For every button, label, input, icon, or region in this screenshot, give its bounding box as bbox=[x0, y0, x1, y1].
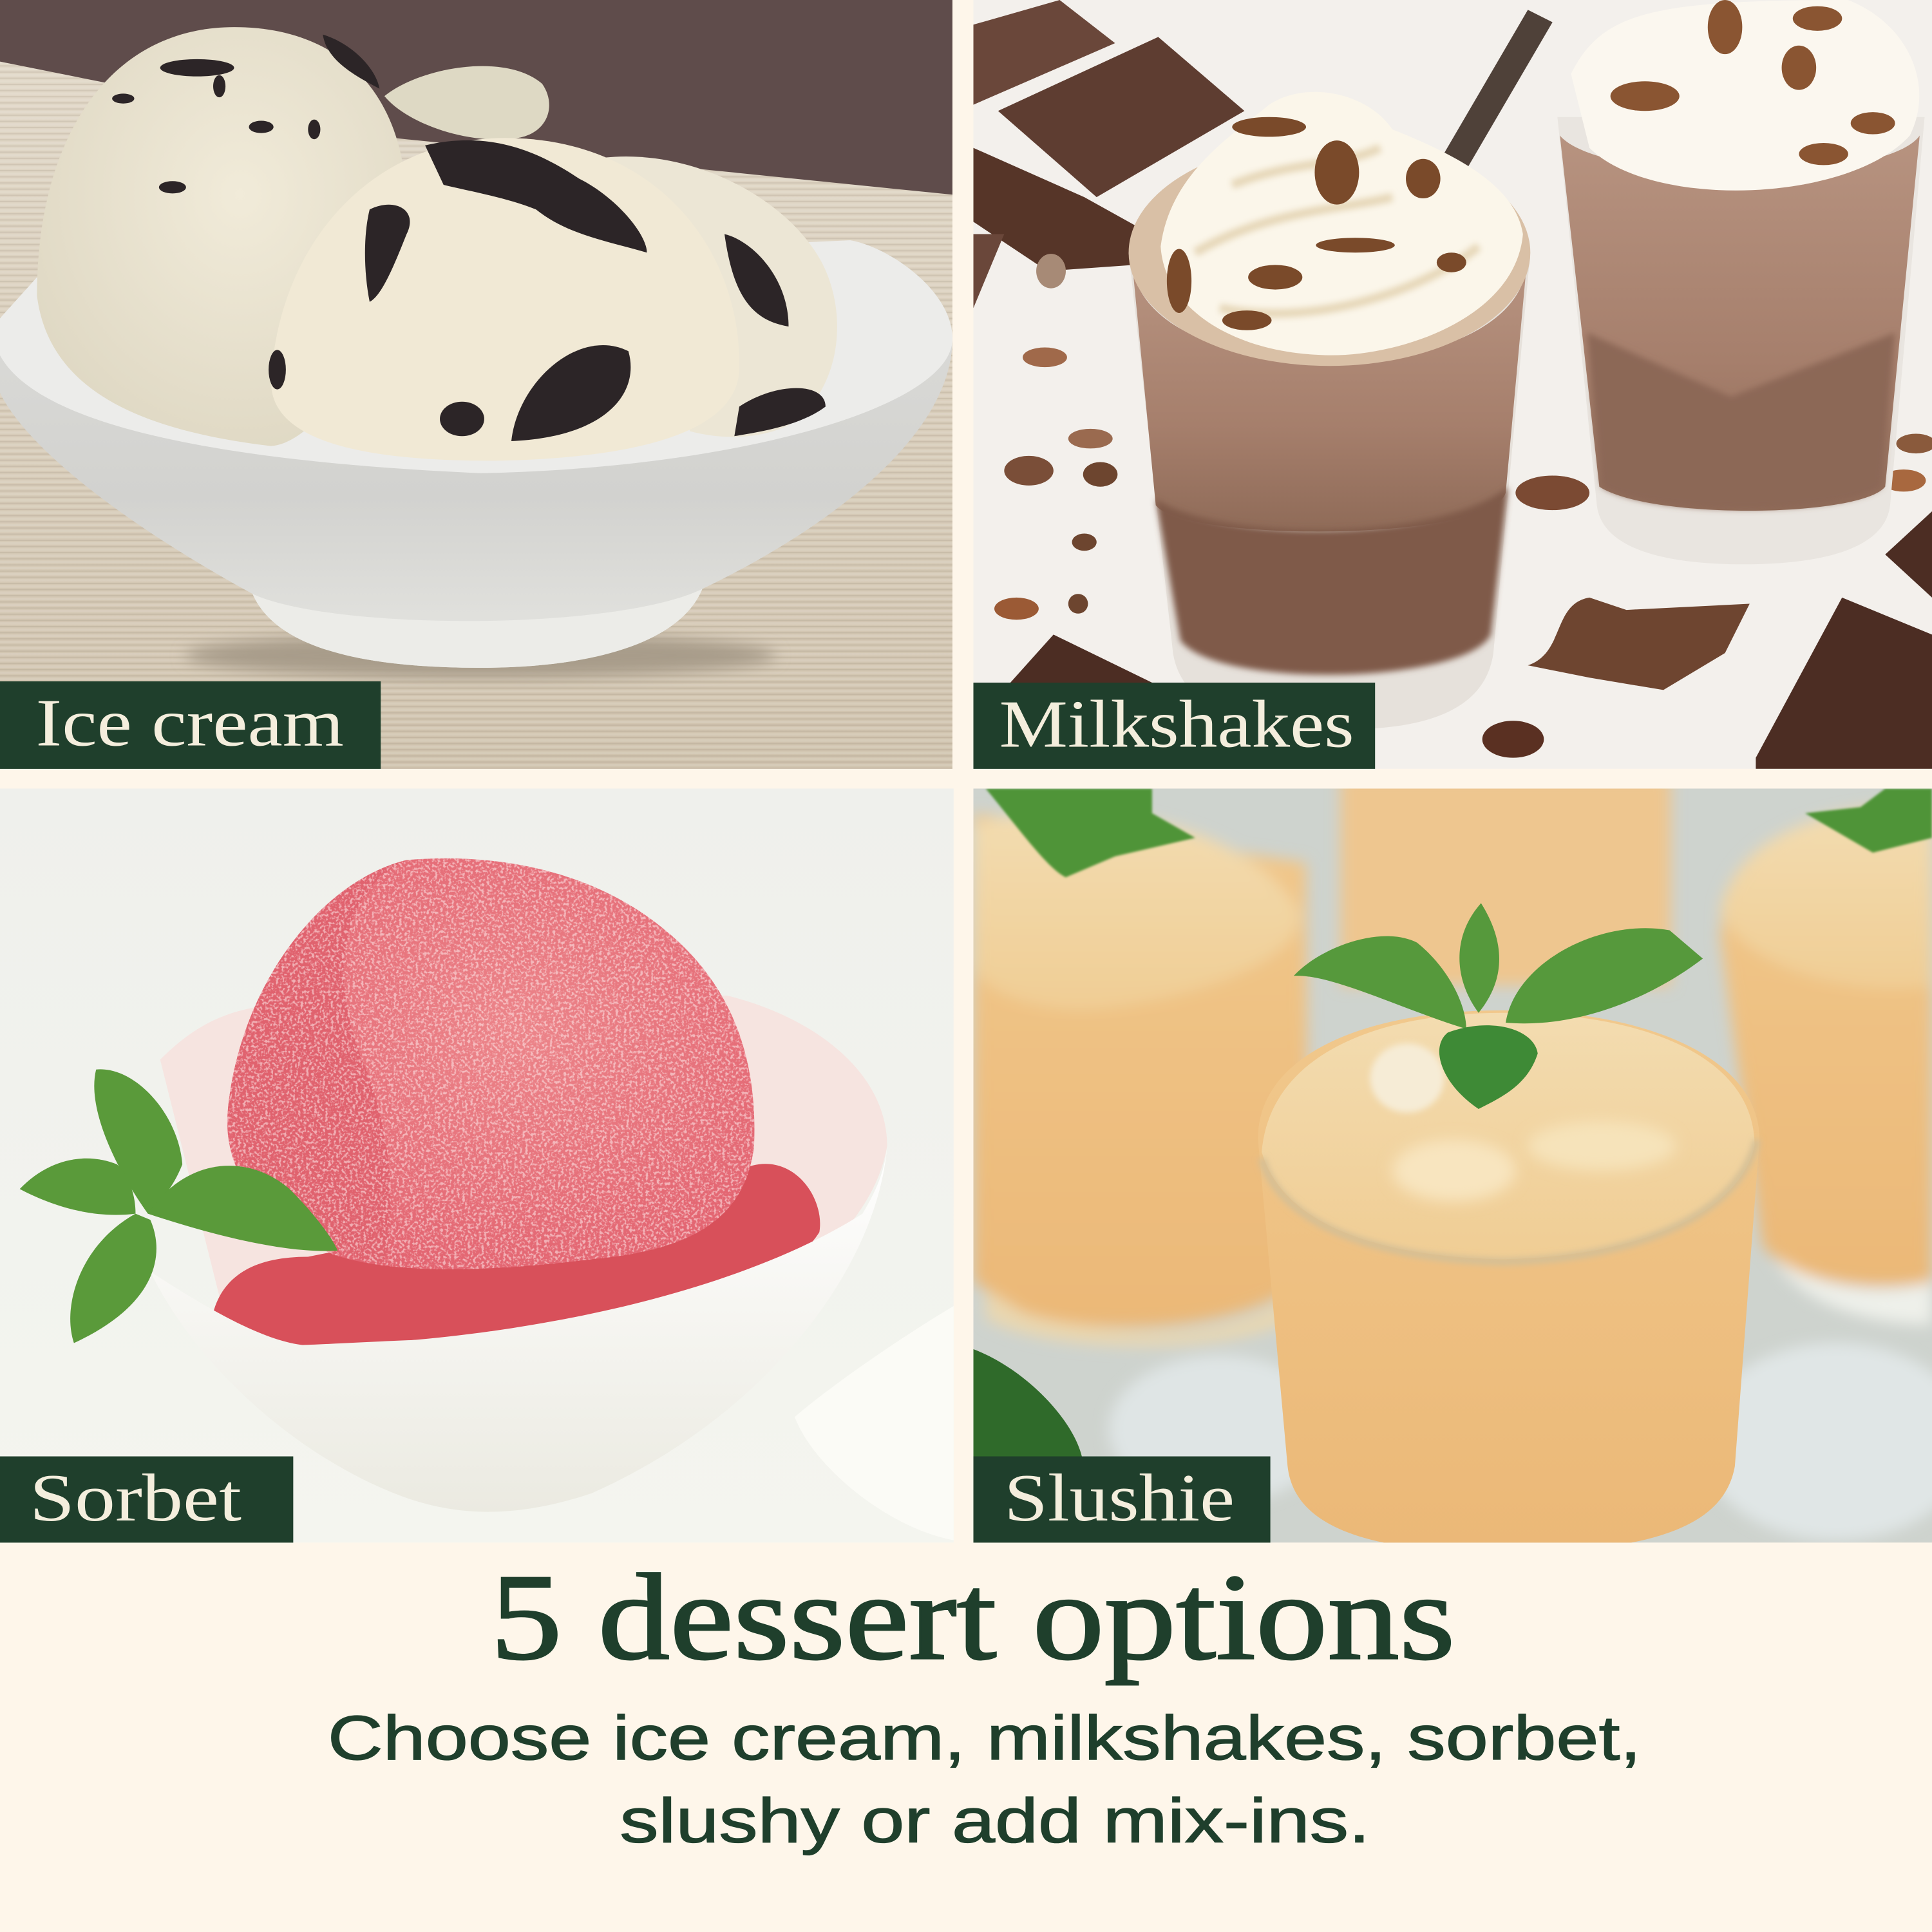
label: milkshakes: Milkshakes bbox=[999, 686, 1354, 761]
bowl bbox=[0, 240, 952, 677]
mint sprig bbox=[20, 1069, 337, 1343]
label: sorbet bbox=[0, 1456, 293, 1542]
chocolate bars bbox=[973, 0, 1932, 769]
background blur bbox=[973, 776, 1932, 1540]
subtitle bbox=[328, 1703, 1641, 1855]
small side dish bbox=[831, 1307, 953, 1388]
panel: slushie bbox=[973, 776, 1932, 1553]
scoops bbox=[37, 27, 837, 461]
label: ice cream bbox=[0, 681, 381, 769]
label: milkshakes bbox=[973, 683, 1375, 769]
whipped cream bbox=[1160, 92, 1523, 355]
cookie pieces bbox=[112, 35, 826, 441]
corner leaves bbox=[973, 788, 1932, 1456]
label: slushie: Slushie bbox=[1004, 1460, 1235, 1535]
left glass bbox=[1129, 139, 1530, 730]
bowl back bbox=[160, 996, 887, 1306]
panel: sorbet bbox=[0, 788, 954, 1542]
right glass bbox=[1557, 0, 1925, 564]
panel: ice cream bbox=[0, 0, 952, 769]
mint leaves bbox=[1294, 903, 1703, 1109]
label: slushie bbox=[973, 1456, 1271, 1542]
subtitle: Choose ice cream, milkshakes, sorbet, bbox=[328, 1703, 1641, 1773]
main glass bbox=[1258, 1010, 1759, 1553]
sorbet scoop bbox=[209, 858, 820, 1345]
title: 5 dessert options bbox=[490, 1549, 1455, 1685]
label: ice cream: Ice cream bbox=[35, 685, 344, 761]
bowl front bbox=[150, 1146, 887, 1512]
label: sorbet: Sorbet bbox=[30, 1460, 242, 1535]
panel: milkshakes bbox=[973, 0, 1932, 769]
subtitle: slushy or add mix-ins. bbox=[620, 1785, 1370, 1855]
straw bbox=[1444, 10, 1553, 166]
